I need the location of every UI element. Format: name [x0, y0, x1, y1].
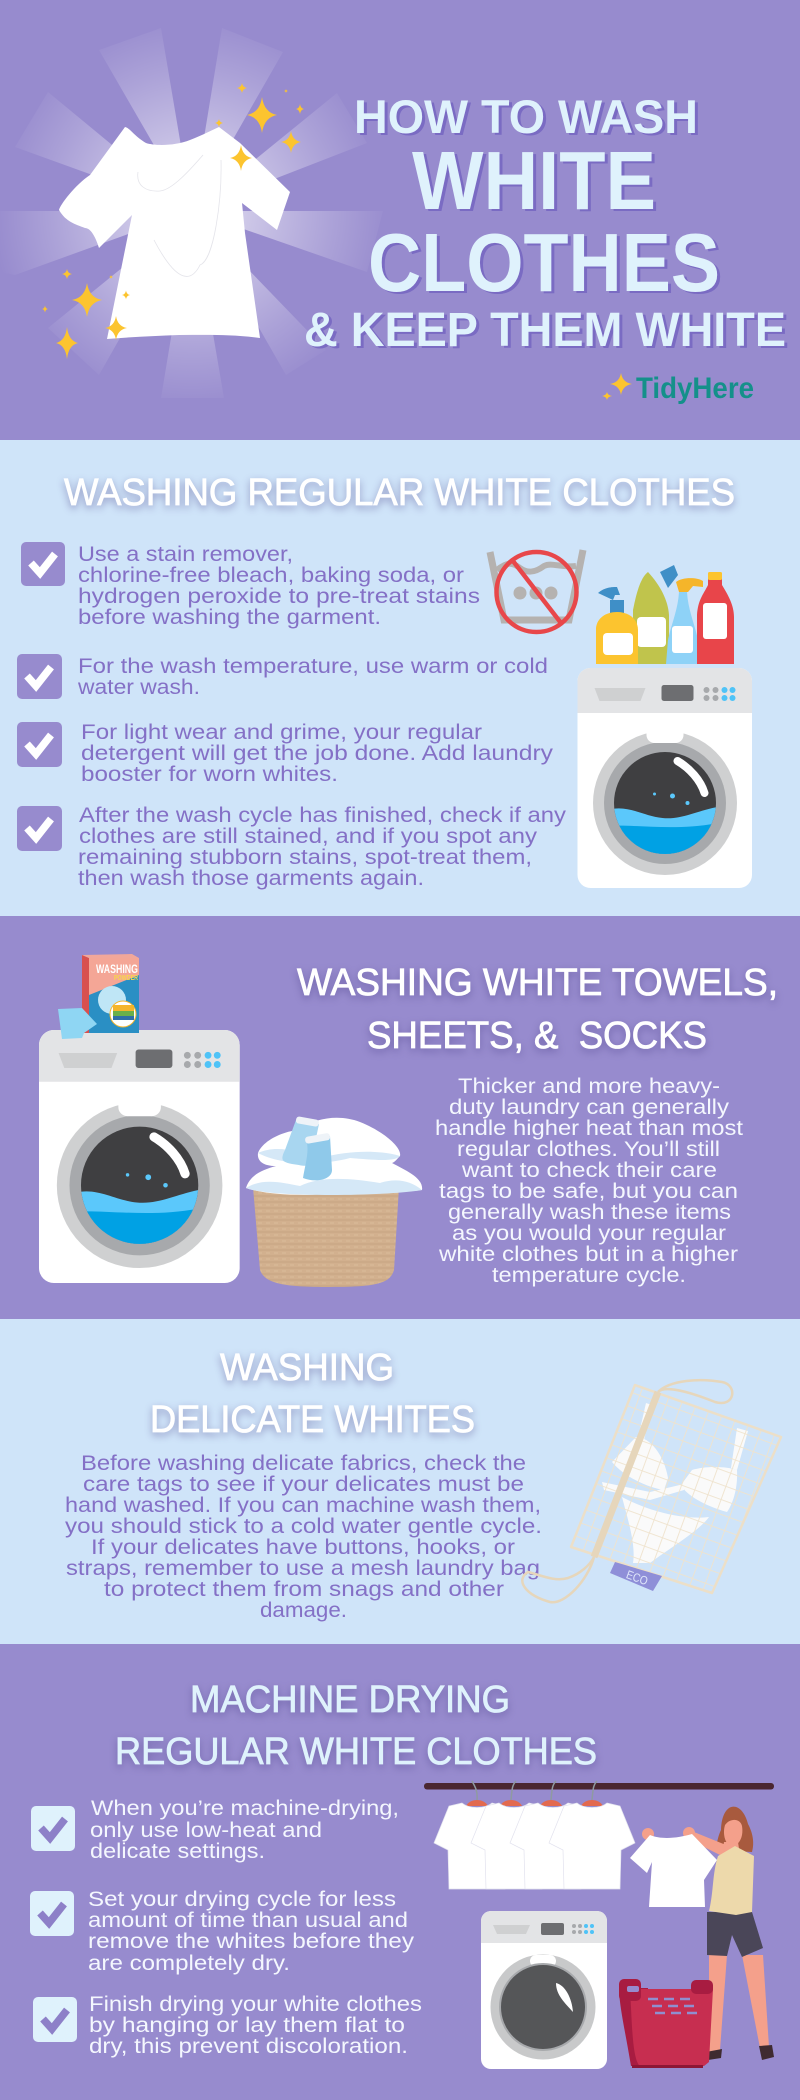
panel: washing regular white clothes	[0, 440, 800, 916]
text block: If your delicates have buttons, hooks, or	[91, 1536, 515, 1559]
heading: WASHING WHITE TOWELS,	[297, 962, 778, 1004]
heading: REGULAR WHITE CLOTHES	[115, 1731, 597, 1773]
icon: red laundry basket	[619, 1979, 713, 2068]
checkbox item 1: chlorine-free bleach, baking soda, or	[78, 564, 464, 587]
ECO tag: ECO	[624, 1567, 650, 1588]
text block: handle higher heat than most	[435, 1117, 743, 1140]
checkbox item 2: amount of time than usual and	[88, 1909, 408, 1932]
icon: washing powder box: POWDER	[114, 975, 138, 982]
checkbox item 2: are completely dry.	[88, 1952, 290, 1975]
text block: Before washing delicate fabrics, check the	[81, 1452, 526, 1475]
title: HOW TO WASH	[354, 90, 698, 143]
panel: washing white towels, sheets and socks	[0, 916, 800, 1319]
text block	[65, 1452, 542, 1622]
panel: header	[0, 0, 800, 440]
checkbox item 3	[33, 1993, 422, 2058]
checkbox item 2	[30, 1888, 415, 1975]
checkbox item 3	[17, 721, 554, 786]
icon: woman holding shirt	[630, 1807, 774, 2060]
heading	[297, 962, 778, 1057]
icon: dryer	[481, 1911, 607, 2069]
title	[304, 90, 786, 357]
title: WHITE	[412, 134, 656, 227]
panel: washing delicate whites	[0, 1319, 800, 1644]
checkbox item 3: Finish drying your white clothes	[89, 1993, 422, 2016]
heading: WASHING REGULAR WHITE CLOTHES	[64, 472, 735, 514]
icon: detergent bottles	[596, 565, 734, 664]
icon: clothes rail with hanging shirts	[424, 1781, 774, 1889]
checkbox item 2: For the wash temperature, use warm or cold	[78, 655, 548, 678]
ECO tag	[610, 1562, 662, 1591]
text block: generally wash these items	[448, 1201, 731, 1224]
checkbox item 3: by hanging or lay them flat to	[89, 2014, 405, 2037]
text block: you should stick to a cold water gentle cycle.	[65, 1515, 542, 1538]
checkbox item 2: Set your drying cycle for less	[88, 1888, 396, 1911]
checkbox item 1: only use low-heat and	[90, 1819, 322, 1842]
checkbox item 2: remove the whites before they	[88, 1930, 415, 1953]
text block: want to check their care	[461, 1159, 717, 1182]
heading: WASHING	[220, 1347, 394, 1389]
checkbox item 4: clothes are still stained, and if you spot any	[79, 825, 538, 848]
text block: tags to be safe, but you can	[439, 1180, 738, 1203]
checkbox item 3: For light wear and grime, your regular	[81, 721, 482, 744]
text block: Thicker and more heavy-	[458, 1075, 720, 1098]
sparkles	[42, 83, 304, 359]
heading: DELICATE WHITES	[150, 1399, 475, 1441]
checkbox item 1	[31, 1797, 399, 1863]
logo: TidyHere: TidyHere	[636, 372, 754, 405]
heading: MACHINE DRYING	[190, 1679, 510, 1721]
checkbox item 3: booster for worn whites.	[81, 763, 338, 786]
text block: regular clothes. You’ll still	[457, 1138, 720, 1161]
text block: white clothes but in a higher	[438, 1243, 738, 1266]
checkbox item 3: detergent will get the job done. Add laundry	[81, 742, 554, 765]
heading	[150, 1347, 475, 1441]
checkbox item 4: then wash those garments again.	[78, 867, 424, 890]
sunburst rays	[0, 28, 383, 398]
text block: as you would your regular	[452, 1222, 726, 1245]
icon: washing machine	[578, 668, 752, 888]
checkbox item 1: before washing the garment.	[78, 606, 381, 629]
panel: machine drying regular white clothes	[0, 1644, 800, 2100]
icon: washing powder box	[58, 954, 139, 1039]
checkbox item 1: Use a stain remover,	[78, 543, 293, 566]
checkbox item 4: After the wash cycle has finished, check if any	[79, 804, 567, 827]
text block: straps, remember to use a mesh laundry bag	[66, 1557, 540, 1580]
icon: laundry basket with linens and socks	[246, 1116, 422, 1287]
heading	[115, 1679, 597, 1773]
icon: white t-shirt	[59, 127, 290, 339]
text block: damage.	[260, 1599, 347, 1622]
icon: do not wash symbol	[490, 550, 583, 632]
text block: to protect them from snags and other	[104, 1578, 504, 1601]
checkbox item 1: When you’re machine-drying,	[91, 1797, 399, 1820]
text block: temperature cycle.	[492, 1264, 686, 1287]
checkbox item 2	[17, 654, 548, 699]
checkbox item 1	[21, 542, 480, 629]
checkbox item 1: hydrogen peroxide to pre-treat stains	[78, 585, 480, 608]
title: & KEEP THEM WHITE	[304, 304, 786, 357]
text block	[435, 1075, 743, 1287]
checkbox item 4	[17, 804, 567, 890]
title: CLOTHES	[368, 216, 720, 309]
icon: washing machine	[39, 1030, 240, 1283]
text block: duty laundry can generally	[449, 1096, 730, 1119]
checkbox item 3: dry, this prevent discoloration.	[89, 2035, 408, 2058]
checkbox item 4: remaining stubborn stains, spot-treat them,	[78, 846, 532, 869]
checkbox item 1: delicate settings.	[90, 1840, 265, 1863]
checkbox item 2: water wash.	[77, 676, 200, 699]
heading: SHEETS, & SOCKS	[367, 1015, 707, 1057]
icon: washing powder box: WASHING	[96, 962, 138, 976]
text block: hand washed. If you can machine wash them,	[65, 1494, 541, 1517]
icon: mesh laundry bag	[522, 1380, 781, 1602]
text block: care tags to see if your delicates must be	[83, 1473, 524, 1496]
